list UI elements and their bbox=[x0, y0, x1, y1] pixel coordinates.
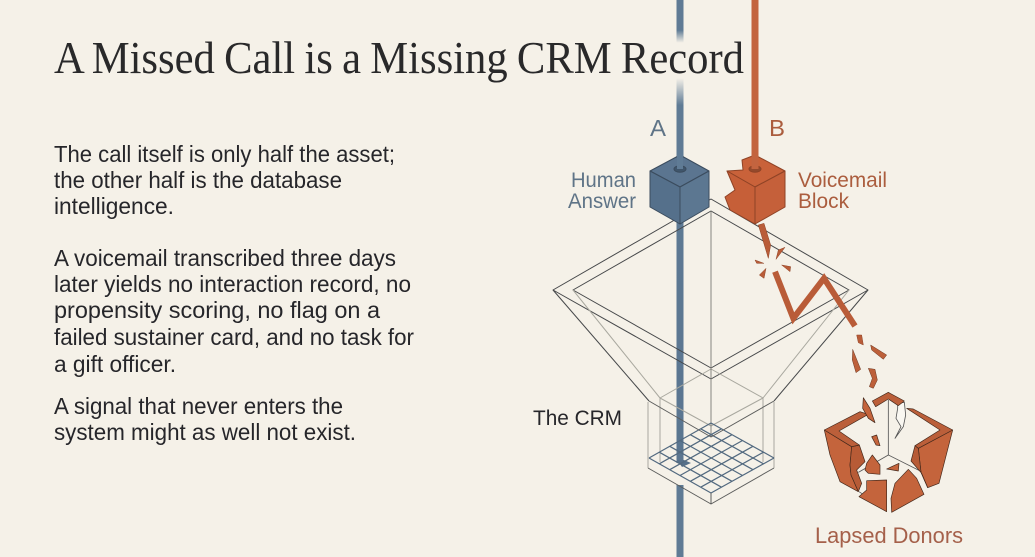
floor and crack bbox=[858, 400, 925, 497]
cube: voicemail block bbox=[725, 155, 785, 224]
label: the CRM: The CRM bbox=[533, 407, 622, 430]
label: lapsed donors: Lapsed Donors bbox=[815, 523, 963, 548]
text block: voicemail bbox=[54, 245, 414, 377]
crate walls bbox=[824, 392, 953, 512]
text block: signal: A signal that never enters the bbox=[54, 393, 343, 419]
text block: voicemail: propensity scoring, no flag on a bbox=[54, 297, 380, 323]
funnel rim bbox=[553, 199, 868, 379]
label: A: A bbox=[650, 115, 667, 141]
CRM funnel and box wireframe bbox=[553, 199, 868, 504]
text block: asset: The call itself is only half the asset; bbox=[54, 141, 395, 167]
label: human answer bbox=[568, 169, 636, 213]
label: human answer: Human bbox=[571, 169, 636, 192]
text block: voicemail: failed sustainer card, and no task for bbox=[54, 324, 414, 350]
label: human answer: Answer bbox=[568, 190, 636, 213]
text block: asset bbox=[54, 141, 395, 219]
text block: voicemail: later yields no interaction record, no bbox=[54, 271, 411, 297]
blue pole A bbox=[676, 0, 691, 557]
label: B: B bbox=[769, 115, 785, 141]
label: voicemail block bbox=[798, 169, 887, 213]
label: voicemail block: Voicemail bbox=[798, 169, 887, 192]
broken box: lapsed donors bbox=[824, 392, 953, 512]
text block: voicemail: a gift officer. bbox=[54, 351, 176, 377]
funnel inner lines bbox=[573, 290, 849, 468]
text block: asset: intelligence. bbox=[54, 193, 174, 219]
text block: asset: the other half is the database bbox=[54, 167, 342, 193]
falling fragments bbox=[852, 345, 887, 388]
funnel sides bbox=[553, 290, 868, 401]
floor grid bbox=[649, 423, 774, 493]
shattered signal path bbox=[755, 223, 863, 345]
box outline bbox=[648, 401, 774, 504]
heading: A Missed Call is a Missing CRM Record bbox=[54, 32, 744, 83]
text block: voicemail: A voicemail transcribed three days bbox=[54, 245, 396, 271]
cube: human answer bbox=[650, 130, 709, 224]
centre vertical bbox=[710, 211, 712, 437]
text block: signal: system might as well not exist. bbox=[54, 419, 356, 445]
orange pole B bbox=[752, 0, 758, 169]
text block: signal bbox=[54, 393, 356, 445]
label: voicemail block: Block bbox=[798, 190, 849, 213]
